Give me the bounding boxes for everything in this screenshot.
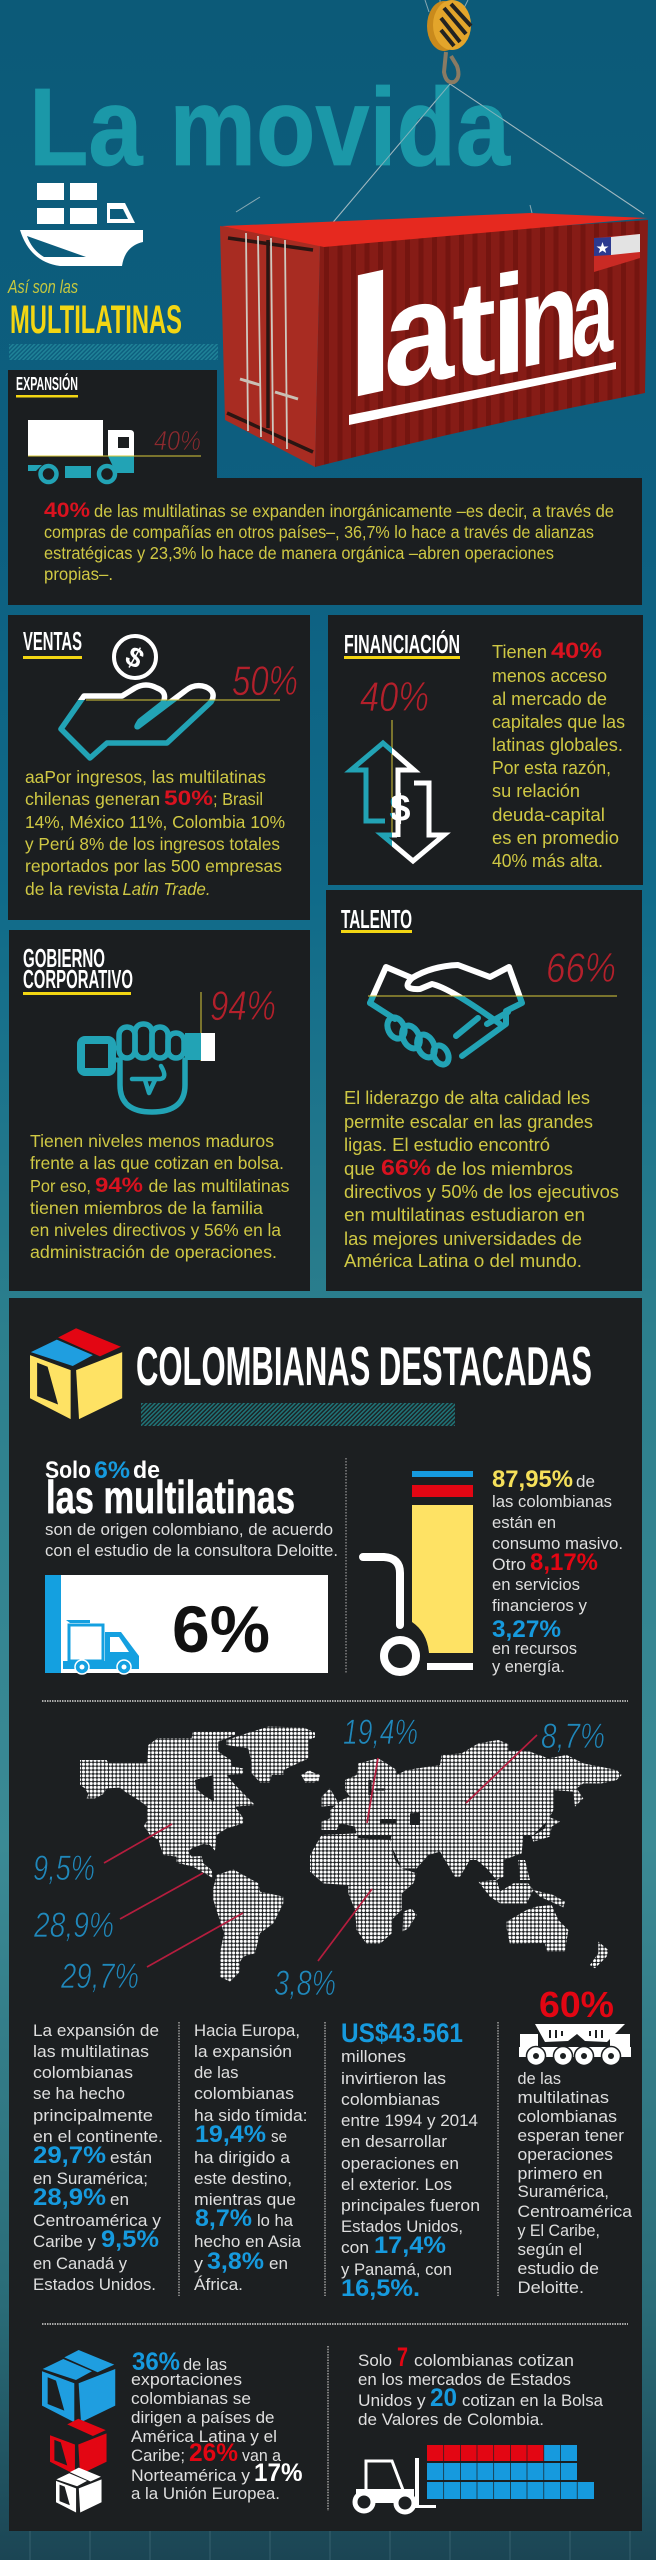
text block: ventas: ; Brasil	[213, 789, 263, 809]
text block: sectors	[492, 1466, 623, 1676]
map values: 9,5%	[33, 1849, 95, 1888]
text block: financiación: Por esta razón,	[492, 757, 611, 778]
text column: 60%: Deloitte.	[518, 2278, 584, 2297]
map values: 8,7%	[541, 1717, 605, 1756]
text block: exports: colombianas se	[131, 2389, 251, 2408]
text block: stock market: en los mercados de Estados	[358, 2370, 571, 2389]
text column: investment: invirtieron las	[341, 2069, 446, 2088]
text block: exports: de las	[183, 2355, 227, 2374]
text block: talento: permite escalar en las grandes	[344, 1111, 593, 1132]
icon: dump truck	[519, 2024, 631, 2066]
text block: solo 6%: con el estudio de la consultora Deloitte.	[45, 1541, 338, 1560]
text block: sectors: consumo masivo.	[492, 1534, 623, 1553]
text column: Europe: 3,8%	[207, 2248, 264, 2275]
text block: financiación: capitales que las	[492, 711, 625, 732]
text block: expansión: compras de compañías en otros países–, 36,7% lo hace a través de alianzas	[44, 522, 594, 542]
text block: financiación: deuda-capital	[492, 804, 605, 825]
crane cables	[236, 0, 644, 233]
text block: ventas: reportados por las 500 empresas	[25, 856, 282, 876]
icon: ship	[20, 183, 143, 266]
map values	[33, 1713, 605, 2003]
text block: exports: Caribe;	[131, 2446, 185, 2465]
text block: sectors: en servicios	[492, 1575, 580, 1594]
text column: Europe: en	[269, 2254, 288, 2273]
text block: talento: en multilatinas estudiaron en	[344, 1204, 585, 1225]
text block: sectors: y energía.	[492, 1657, 565, 1676]
text block: solo 6%	[45, 1457, 338, 1560]
text column: Europe: Hacia Europa,	[194, 2021, 300, 2040]
cables over title	[324, 84, 644, 233]
text block: talento: 66%	[381, 1155, 431, 1180]
text block: talento: de los miembros	[436, 1158, 573, 1179]
text column: Europe: mientras que	[194, 2190, 296, 2209]
text column: 60%: Centroamérica	[518, 2202, 633, 2221]
text block: exports: 26%	[189, 2439, 238, 2467]
text block: talento: El liderazgo de alta calidad les	[344, 1087, 590, 1108]
text block: gobierno corporativo: frente a las que cotizan en bolsa.	[30, 1153, 284, 1173]
text column: investment: entre 1994 y 2014	[341, 2111, 478, 2130]
bottom background strip	[30, 2531, 630, 2560]
text column: investment: operaciones en	[341, 2154, 459, 2173]
text column: continent: principalmente	[33, 2106, 153, 2125]
text column: Europe: este destino,	[194, 2169, 292, 2188]
text column: continent: en el continente.	[33, 2127, 163, 2146]
text column: investment: en desarrollar	[341, 2132, 447, 2151]
text column: Europe: 19,4%	[195, 2121, 266, 2148]
text column: investment: colombianas	[341, 2090, 440, 2109]
text column: Europe: lo ha	[257, 2211, 294, 2230]
text column: continent	[33, 2021, 163, 2294]
text column: 60%: Suramérica,	[518, 2182, 609, 2201]
icon: coin over hand	[61, 636, 213, 758]
text block: financiación: es en promedio	[492, 827, 619, 848]
text column: 60%: colombianas	[518, 2107, 617, 2126]
text column: continent: Centroamérica y	[33, 2211, 162, 2230]
text block: talento: que	[344, 1158, 375, 1179]
text block: sectors: 8,17%	[530, 1549, 598, 1576]
text block: financiación: latinas globales.	[492, 734, 623, 755]
text block: gobierno corporativo: 94%	[95, 1174, 143, 1197]
text block: gobierno corporativo	[30, 1131, 290, 1262]
text block: talento: ligas. El estudio encontró	[344, 1134, 550, 1155]
text column: Europe	[194, 2021, 308, 2294]
callout lines	[104, 1735, 537, 1967]
text block: gobierno corporativo: en niveles directivos y 56% en la	[30, 1220, 281, 1240]
heading: gobierno corporativo	[23, 943, 133, 994]
text column: 60%: según el	[518, 2240, 582, 2259]
text block: sectors: están en	[492, 1513, 556, 1532]
panel: gobierno corporativo	[9, 930, 310, 1291]
heading: expansión: EXPANSIÓN	[16, 373, 78, 394]
text block: expansión	[44, 499, 614, 584]
container word: latina: n	[519, 241, 579, 396]
text column: Europe: y	[194, 2254, 204, 2273]
text block: solo 6%: las multilatinas	[46, 1471, 295, 1523]
icon: handshake	[370, 965, 522, 1067]
text column: investment: millones	[341, 2047, 406, 2066]
heading: ventas: VENTAS	[23, 626, 82, 656]
text block: ventas: chilenas generan	[25, 789, 160, 809]
text block: stock market: cotizan en la Bolsa	[462, 2391, 604, 2410]
text block: ventas: y Perú 8% de los ingresos totales	[25, 834, 280, 854]
text block: sectors: de	[576, 1472, 595, 1491]
text block: solo 6%: de	[133, 1457, 160, 1484]
map values: 19,4%	[343, 1713, 418, 1752]
text column: Europe: se	[271, 2127, 287, 2146]
text column: continent: las multilatinas	[33, 2042, 149, 2061]
text block: exports: a la Unión Europea.	[131, 2484, 280, 2503]
text column: continent: en Suramérica;	[33, 2169, 148, 2188]
map values: 3,8%	[274, 1964, 336, 2003]
text block: stock market: colombianas cotizan	[414, 2351, 574, 2370]
map values: 29,7%	[60, 1957, 139, 1996]
text block: sectors: 3,27%	[492, 1616, 561, 1643]
card: 6%	[45, 1575, 328, 1674]
text block: sectors: 87,95%	[492, 1466, 573, 1493]
text block: stock market: 20	[430, 2384, 457, 2412]
text block: stock market: de Valores de Colombia.	[358, 2410, 544, 2429]
text block: expansión: propias–.	[44, 564, 113, 584]
heading: gobierno corporativo: GOBIERNO	[23, 943, 105, 973]
text block: ventas: de la revista	[25, 879, 119, 899]
text block: gobierno corporativo: tienen miembros de la familia	[30, 1198, 263, 1218]
container roof	[222, 213, 648, 247]
text column: continent: La expansión de	[33, 2021, 159, 2040]
text block: financiación: 40%	[551, 638, 602, 663]
chart: dotted world map	[33, 1713, 622, 2003]
text column: continent: están	[110, 2148, 152, 2167]
container word: latina: i	[491, 243, 527, 406]
text block: solo 6%: Solo	[45, 1457, 91, 1484]
text column: continent: en	[110, 2190, 129, 2209]
text column: continent: Caribe y	[33, 2232, 96, 2251]
text column: investment: y Panamá, con	[341, 2260, 452, 2279]
value: 66%: 66%	[546, 944, 616, 991]
value: 40%: 40%	[360, 673, 429, 720]
text block: exports: van a	[242, 2446, 282, 2465]
text column: 60%: de las	[518, 2069, 561, 2088]
text column: investment: Estados Unidos,	[341, 2217, 463, 2236]
text column: Europe: 8,7%	[195, 2205, 252, 2232]
panel: financiación	[328, 615, 643, 885]
text block: ventas: 14%, México 11%, Colombia 10%	[25, 812, 285, 832]
text block: talento: América Latina o del mundo.	[344, 1250, 582, 1271]
text column: Europe: la expansión	[194, 2042, 292, 2061]
container word: latina	[345, 237, 614, 435]
panel: talento	[326, 890, 642, 1291]
icon: yellow box	[30, 1328, 122, 1419]
text column: continent: 9,5%	[101, 2226, 159, 2253]
text column: Europe: de las	[194, 2063, 238, 2082]
text block: financiación	[492, 638, 625, 871]
illustration: red shipping container	[220, 213, 648, 467]
text column: Europe: África.	[194, 2275, 243, 2294]
text block: gobierno corporativo: de las multilatinas	[148, 1176, 290, 1196]
text block: financiación: su relación	[492, 780, 580, 801]
text block: financiación: al mercado de	[492, 688, 607, 709]
heading: gobierno corporativo: CORPORATIVO	[23, 964, 133, 994]
text block: financiación: 40% más alta.	[492, 850, 603, 871]
panel: ventas	[8, 615, 310, 920]
icon: fist holding key	[81, 1024, 215, 1112]
text block: stock market: Unidos y	[358, 2391, 426, 2410]
card: 6%: 6%	[172, 1592, 270, 1666]
text column: 60%: y El Caribe,	[518, 2221, 600, 2240]
text column: Europe: colombianas	[194, 2084, 294, 2103]
text column: Europe: hecho en Asia	[194, 2232, 302, 2251]
flag of Chile	[594, 234, 640, 272]
text column: 60%: primero en	[518, 2164, 602, 2183]
container long side	[315, 220, 648, 467]
text block: ventas: 50%	[164, 787, 213, 810]
text block: financiación: menos acceso	[492, 665, 607, 686]
heading: financiación: FINANCIACIÓN	[344, 629, 460, 659]
text block: exports	[131, 2348, 302, 2503]
text block: solo 6%: 6%	[94, 1457, 130, 1484]
text block: talento: las mejores universidades de	[344, 1228, 582, 1249]
text column: investment: US$43.561	[341, 2018, 463, 2048]
text block: solo 6%: son de origen colombiano, de acuerdo	[45, 1520, 333, 1539]
text column: 60%	[518, 2069, 633, 2297]
heading: talento: TALENTO	[341, 904, 412, 934]
panel: expansión	[8, 370, 642, 605]
container word: latina: a	[384, 245, 455, 419]
text block: sectors: las colombianas	[492, 1492, 612, 1511]
icon: truck	[28, 420, 134, 482]
text block: gobierno corporativo: administración de operaciones.	[30, 1242, 277, 1262]
text column: investment: 17,4%	[374, 2232, 446, 2259]
icon: blue truck	[63, 1620, 139, 1674]
text block: exports: Norteamérica y	[131, 2466, 251, 2485]
text column: investment: principales fueron	[341, 2196, 480, 2215]
text block: stock market: Solo	[358, 2351, 392, 2370]
value: 60%: 60%	[539, 1984, 614, 2025]
container word: latina: t	[452, 251, 496, 407]
text block: expansión: 40%	[44, 499, 90, 522]
subtitle: multilatinas: MULTILATINAS	[10, 298, 182, 342]
text column: continent: 29,7%	[33, 2142, 106, 2169]
text block: sectors: en recursos	[492, 1639, 577, 1658]
container word: latina: l	[345, 237, 396, 435]
text column: investment	[341, 2018, 480, 2302]
text column: continent: 28,9%	[33, 2184, 106, 2211]
icon: forklift with containers	[355, 2445, 594, 2512]
text column: Europe: ha sido tímida:	[194, 2106, 308, 2125]
text block: stock market	[358, 2342, 604, 2429]
text column: 60%: estudio de	[518, 2259, 599, 2278]
icon: coin over hand: $	[120, 640, 150, 675]
text block: ventas	[25, 767, 285, 899]
text block: gobierno corporativo: Tienen niveles menos maduros	[30, 1131, 274, 1151]
title: La movida	[29, 66, 511, 189]
container door side	[220, 226, 320, 467]
text block: financiación: Tienen	[492, 641, 547, 662]
text block: gobierno corporativo: Por eso,	[30, 1176, 91, 1196]
text block: expansión: estratégicas y 23,3% lo hace de manera orgánica –abren operaciones	[44, 543, 554, 563]
text column: continent: Estados Unidos.	[33, 2275, 156, 2294]
text column: investment: con	[341, 2238, 369, 2257]
icon: up and down arrows with dollar	[351, 743, 444, 861]
text block: exports: dirigen a países de	[131, 2408, 274, 2427]
text block: ventas: aaPor ingresos, las multilatinas	[25, 767, 266, 787]
text block: stock market: 7	[397, 2342, 408, 2372]
text column: continent: colombianas	[33, 2063, 133, 2082]
text column: 60%: multilatinas	[518, 2088, 609, 2107]
text column: Europe: ha dirigido a	[194, 2148, 291, 2167]
text block: sectors: financieros y	[492, 1596, 587, 1615]
text block: exports: 17%	[254, 2459, 302, 2487]
text column: continent: en Canadá y	[33, 2254, 127, 2273]
text block: exports: América Latina y el	[131, 2427, 277, 2446]
text column: 60%: esperan tener	[518, 2126, 624, 2145]
icon: crane hook	[427, 0, 471, 82]
text column: investment: 16,5%.	[341, 2275, 420, 2302]
panel: colombianas destacadas	[9, 1298, 642, 2531]
text block: expansión: de las multilatinas se expanden inorgánicamente –es decir, a través de	[94, 501, 614, 521]
text block: talento: directivos y 50% de los ejecutivos	[344, 1181, 619, 1202]
text block: exports: 36%	[132, 2348, 180, 2376]
subtitle: Así son las: Así son las	[7, 277, 78, 297]
value: 50%: 50%	[232, 657, 298, 704]
icon: hand truck	[363, 1471, 473, 1672]
container word: latina: a	[572, 242, 614, 384]
text column: investment: el exterior. Los	[341, 2175, 452, 2194]
text column: 60%: operaciones	[518, 2145, 613, 2164]
icon: stacked boxes	[42, 2350, 115, 2513]
text block: talento	[344, 1087, 619, 1271]
text block: ventas: Latin Trade.	[122, 879, 210, 899]
text block: exports: exportaciones	[131, 2370, 242, 2389]
value: 94%: 94%	[210, 982, 276, 1029]
text block: sectors: Otro	[492, 1555, 526, 1574]
icon: up and down arrows with dollar: $	[389, 788, 411, 830]
value: 40%: 40%	[154, 425, 201, 456]
map values: 28,9%	[33, 1906, 114, 1945]
text column: continent: se ha hecho	[33, 2084, 125, 2103]
